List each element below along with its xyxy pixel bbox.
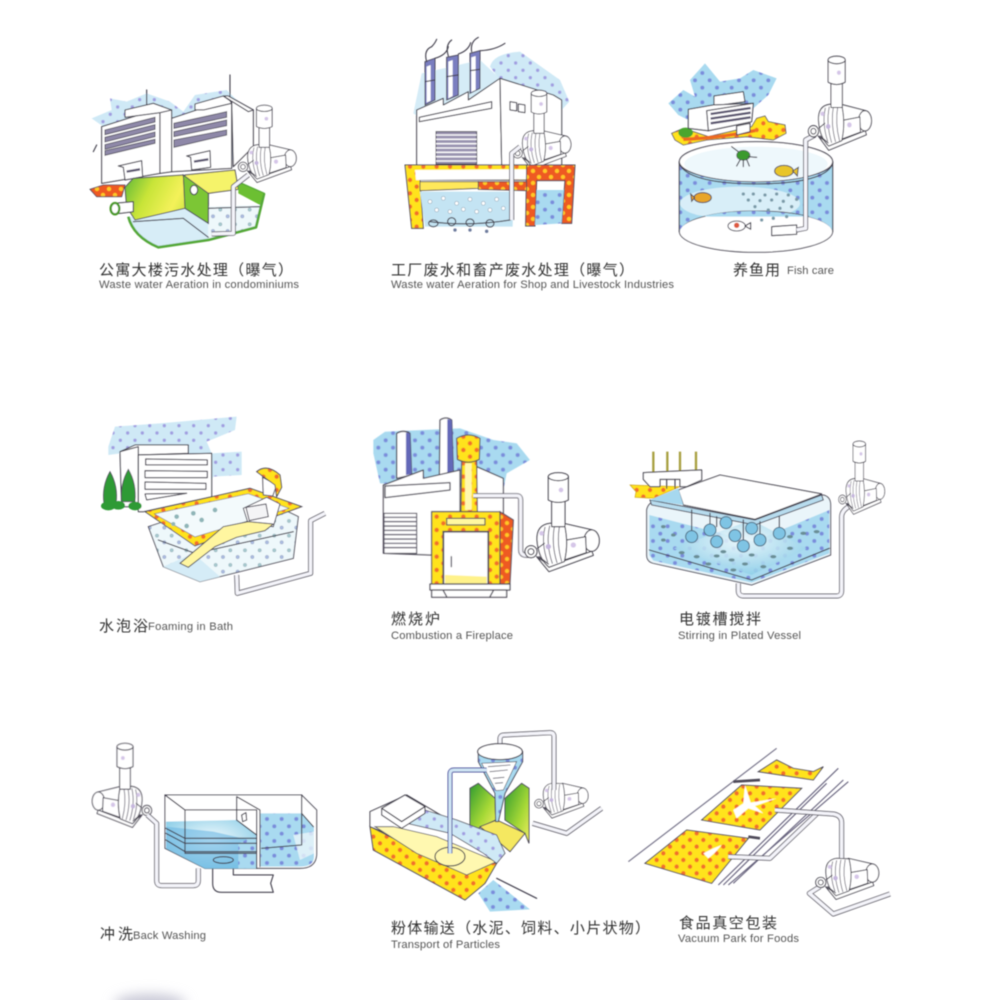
sky <box>373 428 530 490</box>
panel: combustion a fireplace <box>373 418 599 642</box>
illustration: back washing tank <box>92 743 317 892</box>
caption: foaming in bath: Foaming in Bath <box>148 621 233 633</box>
gray smudge at bottom edge <box>114 994 186 1000</box>
round tank <box>679 142 833 252</box>
blower <box>92 743 152 827</box>
blower <box>839 441 885 514</box>
yellow ground <box>672 116 786 145</box>
caption: fish care: 养鱼用 <box>733 261 780 279</box>
pipe <box>738 505 852 596</box>
blue ground <box>478 880 530 912</box>
yellow flag <box>630 485 680 498</box>
sky <box>413 60 503 120</box>
panel: waste water aeration for shop and livestock industries <box>391 37 674 291</box>
blower <box>238 105 296 182</box>
aeration pipe <box>212 175 248 234</box>
chimneys <box>397 418 453 478</box>
caption: shop and livestock: Waste water Aeration for Shop and Livestock Industries <box>391 279 674 291</box>
sky <box>92 90 253 163</box>
illustration: vacuum packing <box>628 748 890 914</box>
caption: foods <box>678 914 799 945</box>
orange inlet <box>90 185 125 197</box>
illustration: condominium sewage tank <box>90 75 296 247</box>
panel: vacuum park for foods <box>628 748 890 945</box>
caption: plated vessel: Stirring in Plated Vessel <box>678 630 801 642</box>
vessel <box>647 495 831 585</box>
water with bubbles <box>420 190 564 233</box>
apartment buildings <box>93 75 253 183</box>
caption: particles: 粉体输送（水泥、饲料、小片状物） <box>391 920 650 937</box>
diffuser <box>772 225 797 236</box>
illustration: fireplace <box>373 418 599 597</box>
illustration: bath <box>101 417 325 593</box>
electrodes <box>686 510 785 552</box>
caption: back washing <box>100 926 206 943</box>
building <box>120 445 212 512</box>
panel: transport of particles <box>370 733 650 951</box>
caption: condominiums: 公寓大楼污水处理（曝气） <box>99 261 293 279</box>
lid <box>650 475 823 525</box>
panel: waste water aeration in condominiums <box>90 75 299 291</box>
blower <box>525 473 599 572</box>
caption: fish care <box>733 261 834 279</box>
aeration pipe <box>512 147 520 220</box>
factory building <box>417 78 562 165</box>
panel: back washing <box>92 743 317 943</box>
factory <box>383 467 503 555</box>
illustration: particle transport <box>370 733 602 912</box>
food packs <box>645 760 823 883</box>
ship hull <box>370 795 505 900</box>
suction pipes <box>728 810 842 858</box>
sky <box>108 417 242 483</box>
panel: fish care <box>668 56 871 279</box>
caption: foods: 食品真空包装 <box>679 914 777 932</box>
suction pipe <box>450 770 487 853</box>
cyclone <box>478 744 523 822</box>
caption: back washing: 冲洗 <box>100 926 133 943</box>
illustration: factory tank <box>405 37 575 233</box>
panel: stirring in plated vessel <box>630 441 885 642</box>
blower <box>513 90 571 169</box>
caption: foaming in bath <box>99 618 233 635</box>
tub <box>145 488 302 582</box>
pipe <box>473 496 530 555</box>
caption: condominiums <box>99 261 299 291</box>
chimneys and smoke <box>425 37 505 105</box>
caption: particles: Transport of Particles <box>391 939 500 951</box>
bubbles <box>742 192 798 222</box>
rods and clamps <box>643 452 702 488</box>
outlet pipe <box>111 202 133 214</box>
caption: foaming in bath: 水泡浴 <box>99 618 148 635</box>
illustration: fish tank <box>668 56 871 252</box>
caption: foods: Vacuum Park for Foods <box>678 933 799 945</box>
illustration: plating vessel <box>630 441 885 596</box>
caption: shop and livestock <box>391 262 674 291</box>
blower <box>808 56 871 150</box>
fish <box>691 165 798 231</box>
conveyor lines <box>628 748 848 885</box>
caption: condominiums: Waste water Aeration in condominiums <box>99 279 299 291</box>
caption: fireplace: 燃烧炉 <box>391 610 440 628</box>
caption: shop and livestock: 工厂废水和畜产废水处理（曝气） <box>391 262 634 279</box>
tank <box>165 795 317 868</box>
sky dots <box>490 52 569 130</box>
blower <box>533 783 602 833</box>
person <box>180 468 282 567</box>
caption: plated vessel: 电镀槽搅拌 <box>679 611 761 628</box>
upper pipe <box>500 733 554 790</box>
caption: fireplace: Combustion a Fireplace <box>391 630 513 642</box>
red and yellow foundation <box>405 165 575 228</box>
trees <box>101 469 142 510</box>
turtle <box>732 147 757 167</box>
blower <box>809 858 890 914</box>
caption: plated vessel <box>678 611 801 642</box>
green tank <box>125 170 264 247</box>
drain pipes <box>147 815 273 892</box>
pipe <box>797 135 815 230</box>
caption: fireplace <box>391 610 513 642</box>
green bins <box>470 783 529 852</box>
caption: particles <box>391 920 650 951</box>
furnace <box>430 512 513 597</box>
drain pipe <box>237 513 325 593</box>
sky <box>668 63 777 120</box>
caption: fish care: Fish care <box>787 265 834 277</box>
panel: foaming in bath <box>99 417 325 635</box>
caption: back washing: Back Washing <box>133 930 206 942</box>
orange chimney <box>457 435 480 512</box>
building <box>688 92 753 135</box>
